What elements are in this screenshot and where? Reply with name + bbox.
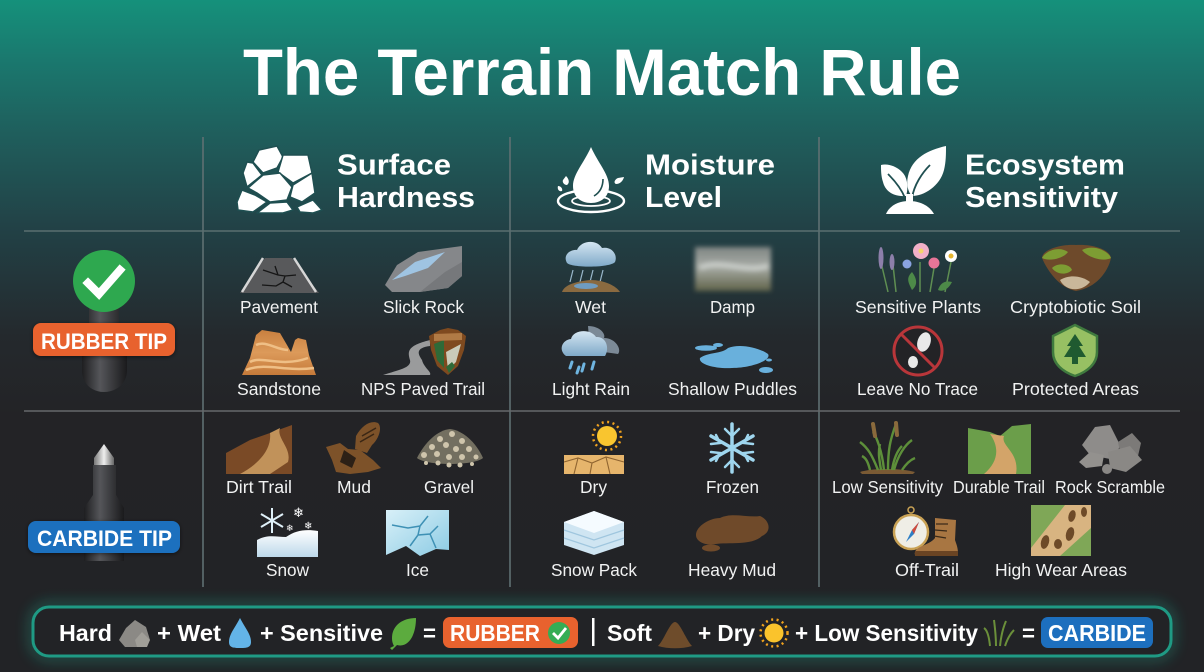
formula bar	[33, 606, 1171, 657]
formula text: =	[423, 620, 436, 646]
icon: rock scramble	[1079, 425, 1142, 474]
label: Damp	[710, 297, 755, 317]
icon: snow pack	[564, 511, 624, 555]
icon: cryptobiotic soil	[1042, 245, 1111, 291]
icon: pavement	[240, 258, 319, 293]
icon: damp haze	[695, 247, 771, 291]
icon: protected shield	[1053, 325, 1097, 376]
heading text	[337, 150, 475, 214]
icon: sprout	[881, 146, 946, 214]
heading text: Ecosystem	[965, 150, 1125, 182]
icon: high wear area	[1031, 505, 1091, 556]
cell: surface hardness, rubber	[237, 246, 485, 399]
icon: sandstone arch	[242, 330, 316, 375]
carbide result badge: CARBIDE	[1048, 620, 1146, 646]
label: Shallow Puddles	[668, 379, 797, 399]
icon: light rain cloud	[562, 326, 619, 373]
formula text: + Wet	[157, 620, 221, 646]
carbide tip badge: CARBIDE TIP	[37, 526, 172, 551]
icon: snow: ❄	[304, 521, 312, 532]
label: Dry	[580, 477, 607, 497]
icon: rubber tip pole	[82, 305, 127, 392]
label: Sandstone	[237, 379, 321, 399]
icon: shallow puddles	[695, 343, 773, 373]
label: Off-Trail	[895, 560, 959, 580]
rubber result badge	[443, 617, 578, 648]
column header: ecosystem sensitivity	[881, 146, 1125, 214]
icon: durable trail	[968, 424, 1031, 474]
label: Mud	[337, 477, 371, 497]
formula text: + Sensitive	[260, 620, 383, 646]
label: Wet	[575, 297, 606, 317]
cell: ecosystem, rubber	[855, 243, 1141, 399]
label: NPS Paved Trail	[361, 379, 485, 399]
heading text: Hardness	[337, 182, 475, 214]
column header: moisture level	[558, 147, 775, 214]
cell: ecosystem, carbide	[832, 423, 1165, 580]
heading text: Moisture	[645, 150, 775, 182]
formula text: + Dry	[698, 620, 755, 646]
icon: green check	[73, 250, 135, 312]
icon: soil pile	[658, 622, 692, 648]
icon: snowflake	[711, 424, 753, 472]
icon: gravel pile	[417, 429, 483, 468]
label: Sensitive Plants	[855, 297, 981, 317]
icon: water drop	[229, 618, 251, 648]
icon: snow: ❄	[286, 523, 294, 533]
icon: sun	[760, 620, 788, 646]
rubber tip badge: RUBBER TIP	[41, 329, 167, 354]
icon: NPS paved trail	[383, 328, 466, 375]
label: Heavy Mud	[688, 560, 776, 580]
label: Light Rain	[552, 379, 630, 399]
label: Snow	[266, 560, 309, 580]
matrix grid lines	[24, 137, 1180, 587]
icon: carbide tip pole	[84, 444, 124, 561]
row label: rubber tip	[33, 250, 175, 392]
divider	[592, 618, 594, 646]
cell: surface hardness, carbide	[226, 422, 483, 580]
heading text: Level	[645, 182, 722, 214]
icon: low sensitivity grass	[860, 423, 915, 474]
rubber result badge: RUBBER	[450, 620, 540, 646]
label: High Wear Areas	[995, 560, 1127, 580]
formula text: + Low Sensitivity	[795, 620, 978, 646]
icon: compass and boot	[894, 507, 958, 556]
icon: water drop with ripple	[558, 147, 624, 212]
label: Slick Rock	[383, 297, 464, 317]
label: Rock Scramble	[1055, 477, 1165, 497]
heading text	[965, 150, 1125, 214]
label: Dirt Trail	[226, 477, 292, 497]
icon: leave no trace	[894, 327, 942, 375]
icon: leaf	[390, 618, 416, 650]
icon: dry cracked land and sun	[564, 422, 624, 474]
heading text: Sensitivity	[965, 182, 1118, 214]
icon: snow: ❄	[293, 505, 304, 520]
label: Pavement	[240, 297, 318, 317]
icon: rocks	[237, 146, 322, 213]
icon: cracked ice	[386, 510, 449, 556]
label: Snow Pack	[551, 560, 637, 580]
cell: moisture, rubber	[552, 242, 797, 399]
formula text: Hard	[59, 620, 112, 646]
title: The Terrain Match Rule	[243, 35, 961, 109]
icon: dirt trail	[226, 425, 292, 474]
label: Frozen	[706, 477, 759, 497]
icon: grass	[984, 620, 1014, 646]
formula text: Soft	[607, 620, 652, 646]
label: Cryptobiotic Soil	[1010, 297, 1141, 317]
icon: sensitive plants	[878, 243, 957, 292]
column header: surface hardness	[237, 146, 475, 214]
label: Protected Areas	[1012, 379, 1139, 399]
row label: carbide tip	[28, 444, 180, 561]
formula text: =	[1022, 620, 1035, 646]
cell: moisture, carbide	[551, 422, 776, 580]
label: Durable Trail	[953, 477, 1045, 497]
label: Leave No Trace	[857, 379, 978, 399]
icon: slick rock	[385, 246, 462, 292]
heading text: Surface	[337, 150, 451, 182]
label: Low Sensitivity	[832, 477, 943, 497]
label: Gravel	[424, 477, 474, 497]
icon: rain cloud	[562, 242, 620, 292]
icon: snow	[257, 505, 318, 557]
heading text	[645, 150, 775, 214]
icon: muddy bootprint	[326, 422, 381, 474]
label: Ice	[406, 560, 429, 580]
icon: rocks	[119, 620, 150, 647]
icon: heavy mud	[696, 515, 769, 552]
